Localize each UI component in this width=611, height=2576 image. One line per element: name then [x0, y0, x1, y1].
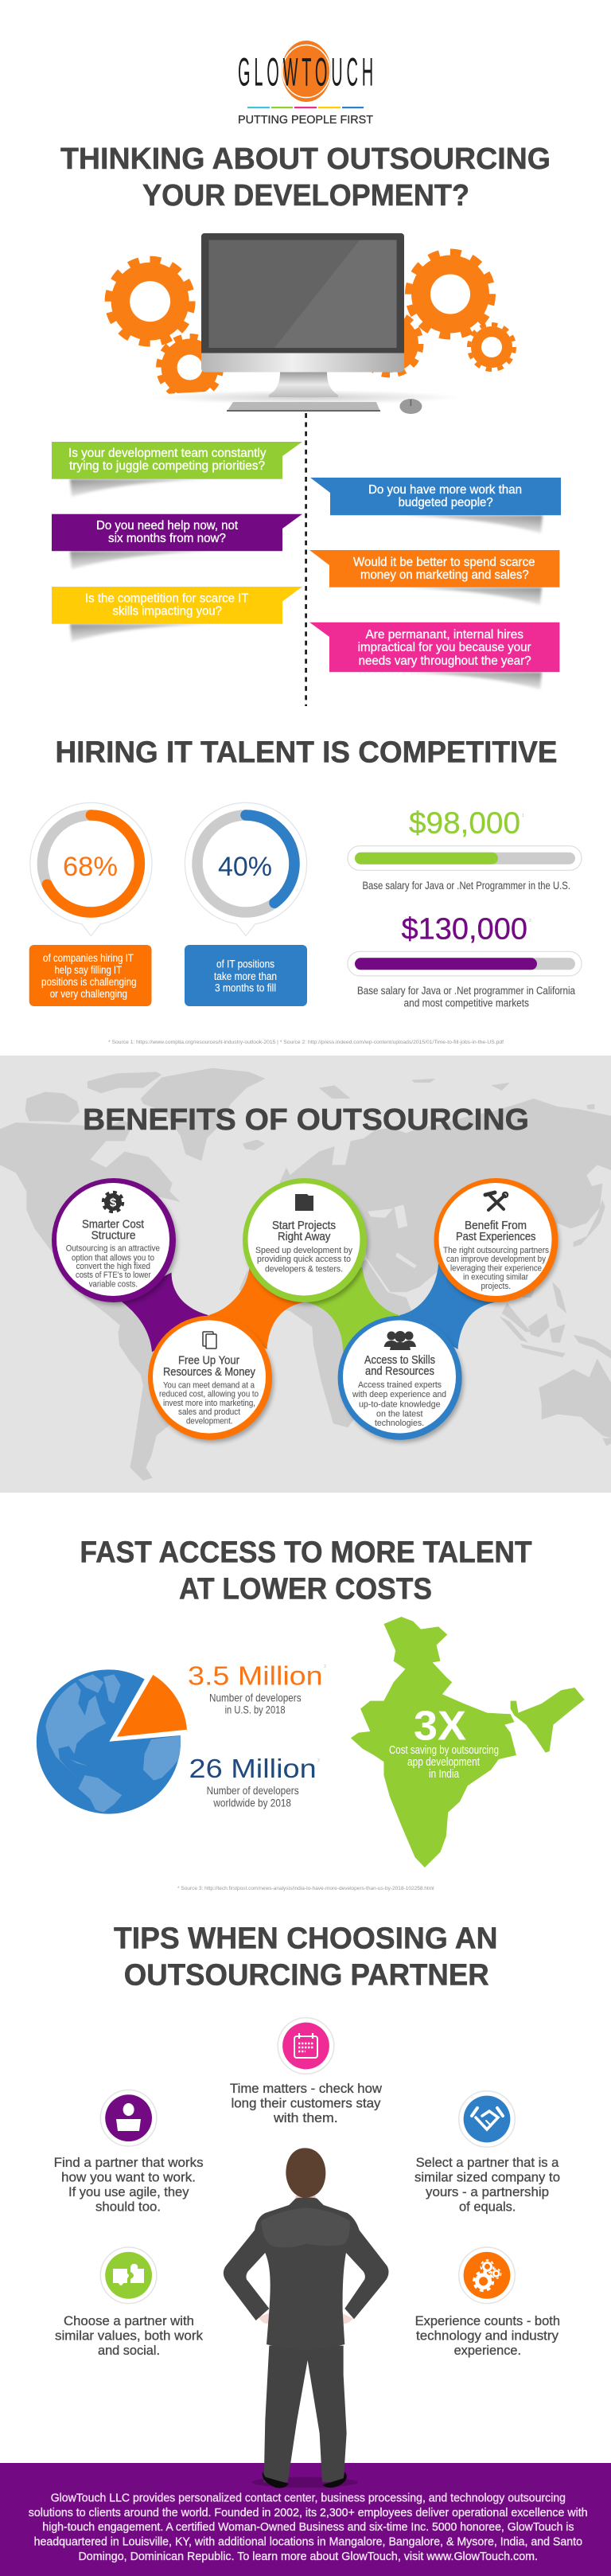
icon: dollar gear: $	[110, 1196, 117, 1210]
icon: people	[384, 1331, 416, 1350]
illustration: monitor with gears	[108, 233, 514, 414]
icon: folder	[295, 1194, 313, 1211]
circle: benefit from past experiences: can improve development by	[446, 1255, 546, 1264]
panel: benefits of outsourcing	[0, 1056, 611, 1493]
heading: benefits: BENEFITS OF OUTSOURCING	[83, 1103, 529, 1137]
tip: similar sized partner: yours - a partnership	[426, 2185, 549, 2199]
ribbon: green question	[52, 442, 302, 497]
ribbon: blue question	[310, 478, 561, 533]
stat: california salary: 2	[529, 919, 531, 923]
circle: access to skills: and Resources	[365, 1365, 434, 1378]
tip: experience counts	[415, 2247, 560, 2358]
circle: smarter cost structure: costs of FTE's to lower	[76, 1270, 151, 1280]
donut: 68 percent: 68%	[63, 852, 118, 882]
circle: smarter cost structure: Structure	[91, 1229, 136, 1242]
circle: free up resources: invest more into marketing,	[163, 1399, 255, 1408]
stat: 26 million: 26 Million	[189, 1754, 317, 1783]
callout: it positions	[185, 945, 307, 1006]
tip: works how you work	[54, 2090, 204, 2215]
world map	[0, 1068, 611, 1481]
tip: experience counts: experience.	[454, 2344, 521, 2358]
donut: 40 percent	[185, 802, 307, 936]
chart: globe pie	[37, 1669, 187, 1814]
title	[60, 142, 551, 213]
source note: * Source 1: https://www.comptia.org/resources/it-industry-outlook-2015 | * Source 2: http://press.indeed.com/wp-content/uploads/2015/01/Time-to-fill-jobs-in-the-US.pdf	[108, 1040, 504, 1045]
ribbon: yellow question: Is the competition for scarce IT	[85, 592, 249, 605]
stat: california salary	[348, 912, 582, 1009]
callout: companies hiring	[29, 945, 152, 1006]
heading: fast access: AT LOWER COSTS	[179, 1573, 432, 1606]
tip: time matters: Time matters - check how	[230, 2082, 382, 2096]
circle: benefit from past experiences: Past Experiences	[456, 1231, 536, 1243]
callout: companies hiring: of companies hiring IT	[43, 952, 134, 964]
stat: 3.5 million: Number of developers	[209, 1691, 302, 1704]
tip: works how you work: If you use agile, they	[68, 2185, 189, 2199]
ribbon: orange question: money on marketing and sales?	[360, 568, 529, 582]
circle: start projects: Right Away	[278, 1231, 331, 1243]
ribbon: pink question	[309, 623, 559, 689]
circle: start projects	[243, 1178, 368, 1305]
stat: california salary: and most competitive markets	[404, 997, 529, 1009]
stat: 3.5 million: 3	[324, 1665, 326, 1669]
icon: gears	[108, 252, 514, 398]
ribbon: pink question: impractical for you because your	[358, 641, 531, 654]
tip: similar sized partner: of equals.	[459, 2200, 516, 2215]
tip: similar sized partner	[414, 2091, 560, 2215]
pie slice	[117, 1675, 187, 1737]
stat: california salary: $130,000	[401, 912, 527, 946]
heading: tips	[114, 1922, 498, 1992]
callout: it positions: of IT positions	[216, 958, 274, 970]
circle: access to skills	[338, 1316, 464, 1442]
tip: similar sized partner: similar sized company to	[414, 2170, 560, 2184]
stat: 26 million: worldwide by 2018	[213, 1796, 291, 1809]
stat: 3.5 million: in U.S. by 2018	[225, 1704, 286, 1716]
ribbon: purple question: six months from now?	[108, 532, 226, 545]
circle: access to skills: Access trained experts	[358, 1380, 442, 1390]
connectors between circles	[119, 1264, 495, 1352]
dotted timeline	[305, 413, 307, 706]
circle: access to skills: up-to-date knowledge	[359, 1399, 441, 1409]
tip: experience counts: Experience counts - both	[415, 2314, 560, 2328]
stat: 3.5 million	[188, 1661, 326, 1716]
circle: start projects: developers & testers.	[265, 1264, 343, 1274]
callout: companies hiring: or very challenging	[50, 988, 127, 1000]
ribbon: green question: trying to juggle competing priorities?	[69, 459, 265, 473]
header logo: GlowTouch: PUTTING PEOPLE FIRST	[238, 113, 373, 127]
tip: similar sized partner: Select a partner that is a	[416, 2156, 559, 2170]
icon: monitor	[201, 233, 422, 414]
circle: free up resources: You can meet demand at a	[163, 1380, 255, 1390]
circle: smarter cost structure: variable costs.	[89, 1279, 138, 1289]
panel: question ribbons	[52, 442, 561, 689]
circle: smarter cost structure: Outsourcing is an attractive	[66, 1244, 160, 1254]
heading: fast access	[80, 1536, 532, 1606]
circle: smarter cost structure: Smarter Cost	[82, 1218, 144, 1231]
circle: free up resources: Free Up Your	[178, 1355, 239, 1368]
icon: person at laptop	[116, 2103, 141, 2131]
footer panel: about GlowTouch: GlowTouch LLC provides personalized contact center, business processing, and technology outsourcing	[51, 2492, 566, 2504]
globe land masses	[45, 1674, 183, 1813]
footer panel: about GlowTouch: solutions to clients around the world. Founded in 2002, its 2,300+ employees deliver operational excellence with	[29, 2506, 588, 2519]
circle: free up resources	[148, 1316, 274, 1442]
ribbon: purple question: Do you need help now, not	[96, 519, 239, 533]
title: THINKING ABOUT OUTSOURCING	[60, 142, 551, 176]
circle: free up resources: development.	[186, 1416, 232, 1426]
head	[286, 2148, 325, 2198]
ribbon: blue question: budgeted people?	[399, 496, 493, 509]
tip: similar values: and social.	[98, 2344, 160, 2358]
icon: gears	[474, 2260, 501, 2291]
tip: works how you work: should too.	[95, 2200, 161, 2215]
heading: tips: TIPS WHEN CHOOSING AN	[114, 1922, 498, 1956]
icon: document copies	[203, 1332, 216, 1348]
map: india: 3X	[414, 1704, 466, 1750]
circle: access to skills: technologies.	[375, 1419, 424, 1428]
circle: smarter cost structure: option that allows you to	[72, 1253, 154, 1263]
header logo: GlowTouch: GLOWTOUCH	[238, 51, 377, 95]
heading: tips: OUTSOURCING PARTNER	[124, 1958, 489, 1992]
tip: similar values: similar values, both work	[55, 2329, 204, 2344]
circle: access to skills: on the latest	[376, 1409, 423, 1419]
ribbon: orange question: Would it be better to spend scarce	[353, 556, 535, 569]
ribbon: blue question: Do you have more work than	[368, 483, 522, 497]
ribbon: purple question	[52, 514, 302, 569]
ribbon: orange question	[309, 550, 559, 605]
tip: works how you work: Find a partner that works	[54, 2156, 204, 2170]
header logo: GlowTouch	[238, 41, 377, 127]
ribbon: yellow question	[52, 587, 302, 642]
stat: us salary	[348, 807, 582, 892]
circle: benefit from past experiences: Benefit From	[465, 1220, 527, 1232]
map: india: app development	[407, 1756, 480, 1769]
ribbon: pink question: needs vary throughout the year?	[359, 654, 531, 668]
circle: benefit from past experiences: projects.	[481, 1282, 511, 1291]
circle: smarter cost structure: convert the high fixed	[76, 1262, 150, 1271]
donut: 68 percent	[30, 802, 152, 936]
heading: fast access: FAST ACCESS TO MORE TALENT	[80, 1536, 532, 1570]
tip: time matters: long their customers stay	[231, 2097, 381, 2111]
water details on map	[368, 1204, 417, 1268]
stat: 26 million: Number of developers	[207, 1784, 299, 1797]
ribbon: yellow question: skills impacting you?	[113, 605, 222, 618]
circle: smarter cost structure	[52, 1178, 177, 1305]
map: india: in India	[429, 1768, 460, 1781]
map: india	[351, 1617, 585, 1868]
callout: it positions: 3 months to fill	[215, 982, 276, 993]
source note: * Source 3: http://tech.firstpost.com/news-analysis/india-to-have-more-developers-than-us-by-2018-102258.html	[177, 1887, 434, 1891]
map: india: Cost saving by outsourcing	[389, 1744, 499, 1757]
icon: hammer and wrench	[485, 1192, 508, 1210]
circle: start projects: Start Projects	[272, 1220, 336, 1232]
stat: us salary: Base salary for Java or .Net Programmer in the U.S.	[363, 880, 570, 892]
tip: similar values	[55, 2247, 204, 2358]
stat: 26 million	[189, 1754, 320, 1809]
circle: benefit from past experiences: in executing similar	[463, 1272, 528, 1282]
stat: 3.5 million: 3.5 Million	[188, 1661, 323, 1691]
icon: dollar gear	[103, 1192, 123, 1212]
ribbon: green question: Is your development team constantly	[68, 447, 267, 460]
illustration: businessman from behind	[224, 2148, 389, 2488]
tip: experience counts: technology and industry	[416, 2329, 559, 2344]
circle: free up resources: sales and product	[178, 1407, 240, 1417]
circle: benefit from past experiences	[434, 1178, 559, 1305]
title: YOUR DEVELOPMENT?	[142, 179, 469, 213]
footer panel: about GlowTouch	[0, 2463, 611, 2576]
donut: 40 percent: 40%	[218, 852, 272, 882]
stat: california salary: Base salary for Java or .Net programmer in California	[357, 985, 575, 997]
stat: us salary: $98,000	[409, 807, 520, 841]
footer panel: about GlowTouch: headquartered in Louisville, KY, with additional locations in Mangalore, Bangalore, & Mysore, India, and Santo	[34, 2535, 582, 2549]
circle: access to skills: Access to Skills	[364, 1354, 435, 1367]
circle: benefit from past experiences: leveraging their experience	[450, 1263, 542, 1273]
stat: 26 million: 3	[317, 1758, 320, 1763]
jacket	[224, 2197, 389, 2350]
hands	[259, 2308, 353, 2324]
tip: time matters	[230, 2018, 382, 2125]
circle: free up resources: reduced cost, allowing you to	[159, 1390, 259, 1399]
circle: benefit from past experiences: The right outsourcing partners	[443, 1246, 549, 1255]
heading: hiring it talent: HIRING IT TALENT IS COMPETITIVE	[56, 736, 557, 770]
callout: companies hiring: help say filling IT	[55, 964, 122, 976]
callout: it positions: take more than	[214, 970, 277, 982]
tip: works how you work: how you want to work.	[61, 2170, 196, 2184]
neck	[296, 2195, 316, 2199]
shoes	[263, 2472, 347, 2488]
ribbon: pink question: Are permanant, internal hires	[366, 628, 523, 642]
callout: companies hiring: positions is challenging	[41, 976, 137, 988]
footer panel: about GlowTouch: Domingo, Dominican Republic. To learn more about GlowTouch, visit www.GlowTouch.com.	[78, 2550, 538, 2563]
icon: handshake	[472, 2108, 503, 2129]
trousers	[264, 2346, 347, 2482]
footer panel: about GlowTouch: high-touch engagement. A certified Woman-Owned Business and six-time Inc. 5000 honoree, GlowTouch is	[42, 2520, 574, 2534]
icon: calendar	[294, 2033, 317, 2058]
tip: time matters: with them.	[273, 2111, 338, 2125]
circle: free up resources: Resources & Money	[163, 1366, 256, 1379]
circle: access to skills: with deep experience and	[352, 1390, 446, 1399]
icon: puzzle	[113, 2264, 144, 2285]
circle: start projects: providing quick access to	[257, 1255, 351, 1264]
tip: similar values: Choose a partner with	[64, 2314, 194, 2328]
circle: start projects: Speed up development by	[255, 1246, 352, 1255]
stat: us salary: 1	[522, 814, 524, 818]
